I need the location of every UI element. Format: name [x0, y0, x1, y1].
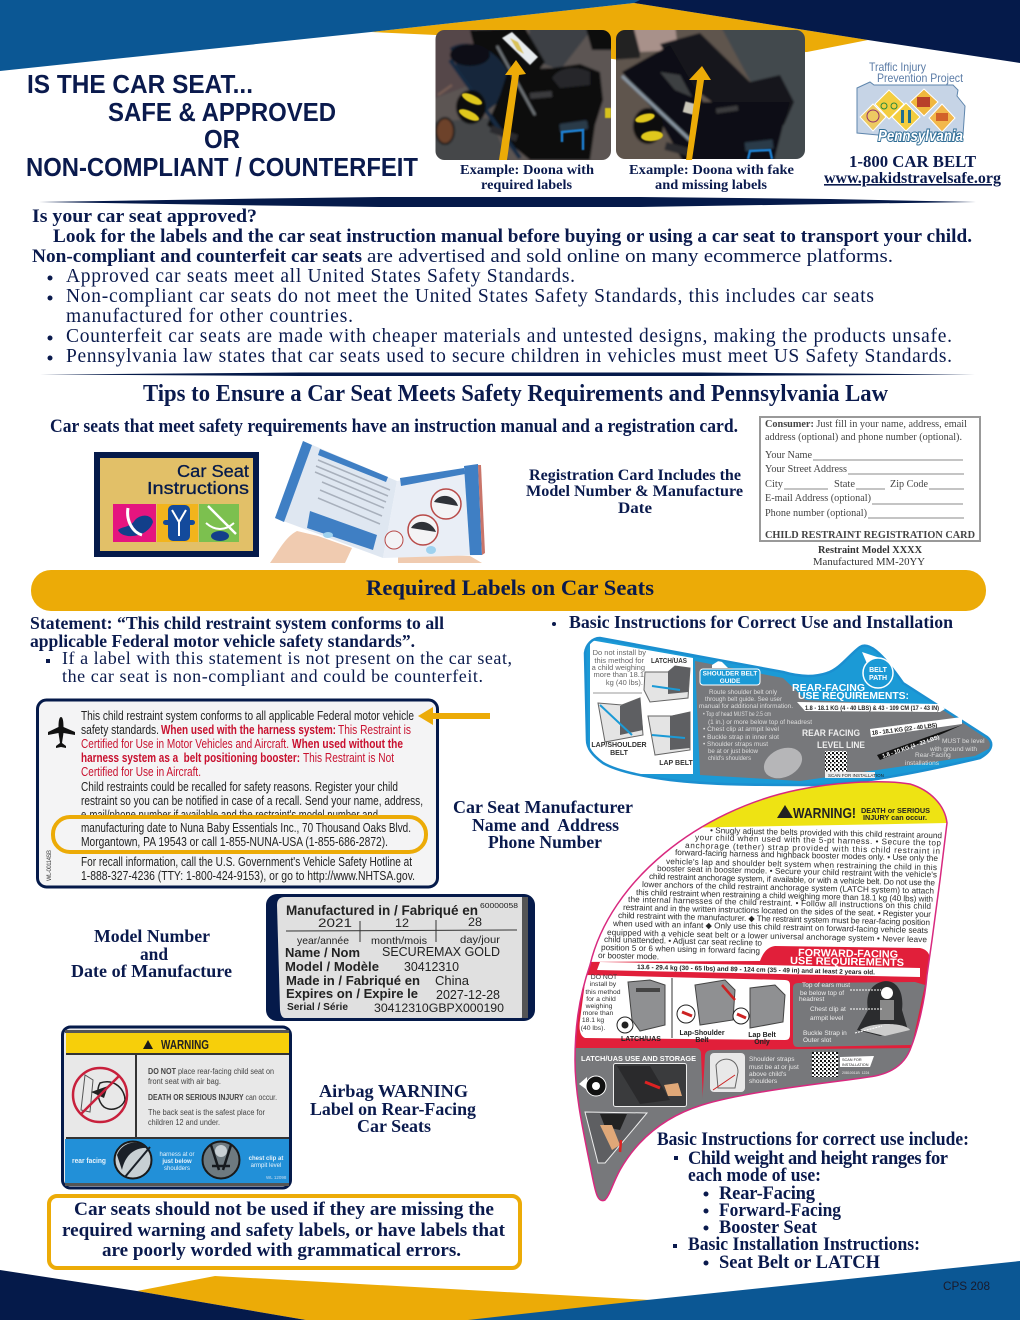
label: airbag warning: The back seat is the safest place for	[148, 1108, 265, 1117]
footer background: navy, gold and blue wedges	[0, 1261, 1020, 1320]
forward-facing install methods: Belt	[695, 1037, 709, 1044]
header background: blue, gold and navy wedges	[0, 0, 1020, 71]
icon: chest clip	[202, 1142, 240, 1178]
warning body text: when used with an infant ◆ Only use this child restraint on forward-facing vehicle seats	[612, 919, 928, 935]
image: instruction manual held open	[270, 441, 485, 563]
statement text: If a label with this statement is not present on the car seat,	[62, 648, 512, 668]
label: rear-facing use requirements: (1 in.) or more below top of headrest	[708, 719, 812, 726]
QR code	[825, 751, 884, 778]
statement text: applicable Federal motor vehicle safety standards”.	[30, 631, 415, 651]
list: basic instructions for correct use: Booster Seat	[719, 1218, 818, 1238]
warning body text: lower anchors of the child restraint anchorage system (LATCH system) to attach	[642, 880, 935, 896]
warning body text: or booster mode.	[598, 951, 659, 961]
label: federal standards statement	[38, 700, 438, 887]
label: federal standards statement: 1-888-327-4236 (TTY: 1-800-424-9153), or go to http://www.NHTSA.gov.	[81, 869, 415, 883]
label: rear-facing use requirements: Do not install by	[593, 648, 646, 657]
warning heading	[777, 805, 930, 822]
title	[26, 71, 418, 182]
document code: CPS 208	[943, 1279, 990, 1293]
label: federal standards statement: restraint so you can be notified in case of a recall. Send your name, address,	[81, 794, 423, 808]
shoulder strap panel: SCAN FOR	[842, 1058, 862, 1062]
text: manufacturer name and address: Car Seat Manufacturer	[453, 797, 633, 817]
belt path badge	[862, 652, 893, 688]
label: federal standards statement: Certified for Use in Motor Vehicles and Aircraft.	[81, 737, 289, 751]
label: airbag warning	[62, 1027, 290, 1188]
label: rear-facing use requirements: REAR FACING	[802, 728, 860, 739]
registration card: address (optional) and phone number (optional).	[765, 432, 962, 443]
forward-facing check panel: armpit level	[810, 1015, 844, 1022]
text: registration card description: Model Number & Manufacture	[526, 483, 743, 500]
shoulder belt guide tag	[700, 669, 760, 685]
label: forward-facing warning	[570, 770, 955, 1215]
label: airbag warning: harness at or	[159, 1152, 195, 1158]
photo captions: Example: Doona with fake	[629, 163, 794, 178]
forward-facing check panel: Top of ears must	[802, 982, 850, 989]
callout: missing labels warning	[49, 1196, 520, 1268]
text: airbag warning	[310, 1081, 476, 1136]
title: SAFE & APPROVED	[108, 99, 336, 127]
icon: booster seat	[199, 504, 239, 542]
arrow: points to statement	[418, 707, 490, 725]
label: federal standards statement: For recall information, call the U.S. Government's Vehicle Safety Hotline at	[81, 855, 412, 869]
shoulder strap panel	[710, 1052, 874, 1092]
label: federal standards statement: This Restraint is Not	[303, 751, 394, 765]
label: manufacture date and model: 30412310	[404, 960, 459, 974]
intro text block: are advertised and sold online on many ecommerce platforms.	[367, 246, 893, 267]
warning heading: WARNING!	[793, 806, 856, 822]
forward-facing check panel	[799, 981, 910, 1044]
registration card: State	[834, 479, 855, 490]
panel: car seat instructions	[94, 452, 259, 557]
label: manufacture date and model: Model / Modèle	[285, 960, 379, 974]
bullet: basic instructions heading: Basic Instructions for Correct Use and Installation	[569, 612, 953, 632]
forward-facing install methods: more than	[583, 1010, 614, 1017]
warning body text: child restraint with the manufacturer. ◆ The restraint system must be rear-facing position	[618, 911, 931, 927]
text: airbag warning: Car Seats	[357, 1116, 431, 1136]
level line bands: 1.8 - 10 KG (4 - 22 LBS)	[882, 735, 941, 760]
forward-facing install methods: for a child	[586, 996, 616, 1003]
label: manufacture date and model: 2027-12-28	[436, 988, 500, 1002]
label: airbag warning: front seat with air bag.	[148, 1077, 221, 1086]
shoulder strap panel: 20810011B 1224	[842, 1071, 869, 1075]
forward-facing install methods: weighing	[585, 1003, 613, 1010]
warning body text: your child when used with the 5-pt harness. • Secure the top	[695, 833, 942, 848]
label: federal standards statement: safety standards.	[81, 723, 159, 737]
forward-facing requirements heading	[790, 947, 904, 969]
registration card model caption: Restraint Model XXXX	[818, 545, 922, 556]
label: airbag warning: WARNING	[161, 1037, 209, 1052]
registration card model caption	[813, 545, 925, 568]
label: manufacture date and model: Expires on / Expire le	[286, 987, 418, 1001]
text: registration card description	[526, 467, 743, 517]
label: rear-facing use requirements: kg (40 lbs).	[606, 678, 643, 687]
warning body text: child unattended. • Adjust car seat recline to	[604, 935, 763, 948]
label: airbag warning: rear facing	[72, 1158, 106, 1165]
icon: harness seat	[157, 504, 198, 542]
list: basic instructions for correct use: Child weight and height ranges for	[688, 1149, 948, 1169]
label: airbag warning: WL 12098	[266, 1175, 287, 1180]
text: manufacturer name and address	[453, 797, 633, 852]
label: rear-facing use requirements: be at or just below	[708, 748, 758, 755]
intro text block: Look for the labels and the car seat instruction manual before buying or using a car seat to transport your child.	[53, 226, 972, 247]
label: federal standards statement: This child restraint system conforms to all applicable Federal motor vehicle	[81, 709, 414, 723]
forward-facing install methods: (40 lbs).	[581, 1025, 605, 1032]
callout: missing labels warning: required warning and safety labels, or have labels that	[62, 1220, 506, 1241]
level line bands: 18 - 18.1 KG (22 - 40 LBS)	[872, 723, 938, 737]
warning heading: DEATH or SERIOUS	[861, 806, 930, 815]
warning body text: anchorage (tether) strap provided with this child restraint in	[685, 841, 941, 856]
bullet list: safety standards: Non-compliant car seats do not meet the United States Safety Standards, this includes car seats	[66, 286, 874, 307]
label: rear-facing use requirements: through belt guide. See user	[705, 696, 783, 703]
bullet list: safety standards: Counterfeit car seats are made with cheaper materials and untested designs, making the products unsafe.	[66, 326, 952, 347]
label: rear-facing use requirements: • Buckle strap in inner slot	[703, 734, 779, 741]
forward-facing check panel: Outer slot	[803, 1037, 831, 1044]
list: basic instructions for correct use: Rear-Facing	[719, 1184, 816, 1204]
registration card: Zip Code	[890, 479, 928, 490]
title: IS THE CAR SEAT...	[27, 71, 253, 99]
label: federal standards statement: Child restraints could be recalled for safety reasons. Register your child	[81, 780, 398, 794]
forward-facing install methods: Only	[754, 1039, 770, 1046]
panel: car seat instructions: Car Seat	[177, 461, 249, 481]
label: manufacture date and model: Manufactured in / Fabriqué en	[286, 902, 478, 918]
shoulder belt guide tag: GUIDE	[720, 678, 741, 685]
registration card model caption: Manufactured MM-20YY	[813, 557, 925, 568]
warning body text: booster seat in booster mode. • Secure your child restraint with the vehicle's	[657, 864, 937, 879]
shoulder strap panel: above child's	[749, 1071, 787, 1078]
label: airbag warning: chest clip at	[249, 1156, 283, 1162]
list: basic instructions for correct use: Basic Installation Instructions:	[688, 1235, 920, 1255]
label: rear-facing use requirements: installations	[905, 760, 940, 767]
intro text block: Is your car seat approved?	[32, 206, 257, 227]
label: forward-facing warning: 13.6 - 29.4 kg (30 - 65 lbs) and 89 - 124 cm (35 - 49 in) and at least 2 years old.	[637, 964, 875, 976]
warning body text: vehicle's lap and shoulder belt system when restraining the child in this	[666, 857, 937, 872]
label: rear-facing use requirements: more than 18.1	[594, 670, 644, 679]
warning body text: • Snugly adjust the belts provided with this child restraint around	[710, 826, 943, 840]
forward-facing check panel: Buckle Strap in	[803, 1030, 847, 1037]
bullet list: safety standards: Approved car seats meet all United States Safety Standards.	[66, 266, 575, 287]
bullet list: safety standards: manufactured for other countries.	[66, 306, 353, 327]
label: rear-facing use requirements: LAP/SHOULDER	[591, 742, 647, 749]
label: federal standards statement: manufacturing date to Nuna Baby Essentials Inc., 70 Thousand Oaks Blvd.	[81, 821, 411, 835]
text: airbag warning: Airbag WARNING	[319, 1081, 468, 1101]
photo: Doona with required labels	[436, 30, 611, 160]
forward-facing requirements heading: FORWARD-FACING	[798, 947, 898, 961]
label: airbag warning: just below	[161, 1159, 192, 1165]
registration card: CHILD RESTRAINT REGISTRATION CARD	[765, 529, 975, 541]
latch use and storage panel	[579, 1056, 696, 1163]
list: basic instructions for correct use: Forward-Facing	[719, 1201, 842, 1221]
intro text block	[32, 206, 972, 267]
level line bands	[870, 717, 962, 760]
text: model number and date: and	[140, 944, 168, 964]
forward-facing install methods	[581, 974, 785, 1046]
icon: airplane	[48, 717, 75, 748]
callout: missing labels warning: Car seats should not be used if they are missing the	[74, 1199, 494, 1220]
forward-facing check panel: be below top of	[800, 990, 844, 997]
warning body text: the internal harnesses of the child restraint. • Follow all instructions on this child	[628, 895, 932, 911]
label: rear-facing use requirements: manual for additional information.	[699, 703, 793, 710]
text: registration card description: Date	[618, 500, 652, 517]
forward-facing check panel: headrest	[799, 996, 824, 1003]
shoulder strap panel: INSTALLATION	[842, 1063, 869, 1067]
forward-facing install methods: this method	[585, 989, 621, 996]
shoulder belt guide tag: SHOULDER BELT	[703, 670, 757, 678]
label: federal standards statement: Certified for Use in Aircraft.	[81, 765, 201, 779]
list: basic instructions for correct use: Basic Instructions for correct use include:	[657, 1130, 969, 1150]
banner: required labels	[31, 570, 986, 611]
label: airbag warning: children 12 and under.	[148, 1118, 220, 1127]
text: manufacturer name and address: Phone Number	[488, 832, 602, 852]
photo captions: Example: Doona with	[460, 163, 594, 178]
label: manufacture date and model: year/année	[297, 935, 349, 947]
list: basic instructions for correct use: Seat Belt or LATCH	[719, 1253, 881, 1273]
callout: missing labels warning: are poorly worded with grammatical errors.	[102, 1240, 461, 1261]
photo captions: and missing labels	[655, 178, 768, 193]
panel: car seat instructions: Instructions	[147, 478, 249, 498]
list: basic instructions for correct use	[657, 1130, 969, 1273]
icon: rear-facing seat	[113, 504, 156, 542]
warning heading: INJURY can occur.	[863, 813, 927, 822]
heading: tips: Tips to Ensure a Car Seat Meets Safety Requirements and Pennsylvania Law	[143, 381, 889, 407]
belt path badge: PATH	[869, 675, 887, 682]
registration card: Your Name	[765, 450, 812, 461]
label: federal standards statement: When used without the	[292, 737, 403, 751]
forward-facing install methods: Lap Belt	[748, 1032, 776, 1039]
label: manufacture date and model: 60000058	[480, 901, 518, 910]
icon: harness at shoulders	[114, 1142, 152, 1178]
weight strip: 1.8 - 18.1 KG (4 - 40 LBS) & 43 - 109 CM (17 - 43 IN)	[805, 705, 939, 712]
label: rear-facing use requirements: a child weighing	[592, 663, 645, 672]
registration card: Consumer: Just fill in your name, address, email	[765, 419, 967, 430]
label: rear-facing use requirements: Rear-Facing	[915, 752, 951, 759]
label: rear-facing use requirements: LEVEL LINE	[817, 740, 865, 751]
icon: seat latch	[644, 666, 690, 702]
shoulder strap panel: Shoulder straps	[749, 1056, 795, 1063]
registration card	[760, 417, 980, 541]
label: airbag warning: armpit level	[251, 1163, 281, 1169]
registration card: E-mail Address (optional)	[765, 493, 871, 504]
icon: seat lap belt	[648, 712, 690, 755]
forward-facing requirements heading: USE REQUIREMENTS	[790, 955, 904, 969]
intro text block: Non-compliant and counterfeit car seats	[32, 246, 362, 267]
label: airbag warning: DEATH OR SERIOUS INJURY can occur.	[148, 1093, 277, 1102]
label: rear-facing use requirements: • Top of head MUST be 2.5 cm	[703, 711, 771, 718]
label: rear-facing use requirements: • Shoulder straps must	[703, 741, 768, 748]
statement text: the car seat is non-compliant and could be counterfeit.	[62, 666, 483, 686]
label: rear-facing use requirements: • Chest clip at armpit level	[703, 726, 780, 733]
contact: phone and website: www.pakidstravelsafe.org	[824, 170, 1001, 187]
warning body text: this child restraint when restraining a child weighing more than 18.1 kg (40 lbs) with	[636, 888, 934, 904]
contact: phone and website	[824, 152, 1001, 187]
label: rear-facing use requirements: MUST be level	[942, 738, 985, 745]
label: federal standards statement: WL-00114SB	[47, 850, 53, 881]
photo: Doona with fake labels	[616, 30, 805, 159]
text: registration card description: Registration Card Includes the	[529, 467, 741, 484]
warning body text	[598, 826, 943, 961]
contact: phone and website: 1-800 CAR BELT	[849, 152, 976, 171]
belt path badge: BELT	[869, 667, 888, 674]
label: federal standards statement: When used with the harness system:	[161, 723, 336, 737]
logo: Traffic Injury Prevention Project Pennsylvania	[857, 60, 965, 145]
label: manufacture date and model: 28	[468, 915, 482, 929]
label: manufacture date and model: Made in / Fabriqué en	[286, 974, 420, 988]
registration card: Your Street Address	[765, 464, 847, 475]
label: manufacture date and model: Serial / Série	[287, 1001, 348, 1013]
photo captions	[460, 163, 794, 193]
label: rear-facing use requirements: this method for	[594, 656, 644, 665]
label: rear-facing use requirements: REAR-FACING	[792, 683, 865, 694]
QR code: SCAN FOR INSTALLATION	[828, 773, 884, 778]
label: rear-facing use requirements: LATCH/UAS	[651, 658, 687, 665]
registration card: Phone number (optional)	[765, 508, 867, 519]
text: model number and date: Model Number	[94, 926, 210, 946]
label: manufacture date and model	[266, 894, 535, 1021]
label: rear-facing use requirements: with ground with	[929, 746, 977, 753]
label: manufacture date and model: day/jour	[460, 934, 501, 946]
label: manufacture date and model: China	[435, 974, 469, 988]
bullet list: safety standards	[48, 266, 952, 367]
text: manufacturer name and address: Name and Address	[472, 815, 619, 835]
logo: Traffic Injury Prevention Project Pennsylvania: Traffic Injury	[869, 60, 926, 74]
shoulder strap panel: shoulders	[749, 1078, 778, 1085]
label: manufacture date and model: 30412310GBPX000190	[374, 1001, 504, 1015]
warning body text: child restraint anchorage system, if available, or with a vehicle belt. Do not use the	[649, 872, 936, 887]
warning body text: equipped with a vehicle seat belt or a lower universal anchorage system • Never leave	[607, 928, 928, 944]
label: federal standards statement: This Restraint is	[338, 723, 411, 737]
warning body text: position 5 or 6 when using in forward facing	[601, 943, 761, 956]
statement text	[30, 613, 512, 686]
label: airbag warning: DO NOT place rear-facing child seat on	[148, 1067, 274, 1076]
label: airbag warning: shoulders	[164, 1166, 190, 1172]
text: model number and date: Date of Manufacture	[71, 961, 232, 981]
forward-facing check panel: Chest clip at	[810, 1006, 846, 1013]
label: rear-facing use requirements: LAP BELT	[659, 760, 694, 767]
label: rear-facing use requirements	[580, 630, 1000, 790]
text: model number and date	[71, 926, 232, 981]
logo: Traffic Injury Prevention Project Pennsylvania: Pennsylvania	[878, 128, 963, 145]
warning body text: restraint and in the written instructions located on the sides of the seat. • Register your	[623, 903, 931, 919]
shoulder strap panel: must be at or just	[749, 1064, 799, 1071]
forward-facing install methods: DO NOT	[591, 974, 617, 981]
title: OR	[204, 126, 240, 154]
logo: Traffic Injury Prevention Project Pennsylvania: Prevention Project	[877, 71, 964, 85]
weight strip	[797, 702, 945, 712]
label: manufacture date and model: SECUREMAX GOLD	[382, 945, 500, 959]
icon: no rear-facing seat in front of airbag	[73, 1068, 127, 1122]
label: manufacture date and model: month/mois	[371, 935, 427, 947]
banner: required labels: Required Labels on Car Seats	[366, 575, 654, 600]
statement text: Statement: “This child restraint system conforms to all	[30, 613, 444, 633]
registration card: City	[765, 479, 784, 490]
label: rear-facing use requirements: Route shoulder belt only	[709, 689, 778, 696]
arrow: missing labels	[686, 66, 711, 160]
label: federal standards statement: Morgantown, PA 19543 or call 1-855-NUNA-USA (1-855-686-2872).	[81, 835, 388, 849]
icon: seat lap-shoulder belt	[598, 698, 643, 742]
title: NON-COMPLIANT / COUNTERFEIT	[26, 154, 418, 182]
label: federal standards statement: harness system as a belt positioning booster:	[81, 751, 300, 765]
latch use and storage panel: LATCH/UAS USE AND STORAGE	[581, 1056, 696, 1063]
label: manufacture date and model: Name / Nom	[285, 946, 360, 960]
label: manufacture date and model: 2021	[318, 916, 352, 930]
label: rear-facing use requirements: USE REQUIREMENTS:	[798, 691, 909, 702]
label: federal standards statement: e-mail/phone number if available and the restraint's model number and	[81, 808, 378, 822]
warning body text: forward-facing harness and highback booster modes only. • Use only the	[675, 848, 939, 863]
forward-facing install methods: install by	[590, 981, 617, 988]
bullet list: safety standards: Pennsylvania law states that car seats used to secure children in vehicles must meet US Safety Standards.	[66, 346, 952, 367]
label: manufacture date and model: 12	[395, 916, 409, 930]
subheading: manual and card: Car seats that meet safety requirements have an instruction manual and a registration card.	[50, 417, 738, 437]
text: airbag warning: Label on Rear-Facing	[310, 1099, 476, 1119]
forward-facing install methods: Lap-Shoulder	[679, 1030, 725, 1037]
forward-facing install methods: 18.1 kg	[582, 1017, 604, 1024]
forward-facing install methods: LATCH/UAS	[621, 1036, 661, 1043]
label: rear-facing use requirements: BELT	[610, 750, 629, 757]
label: rear-facing use requirements: child's shoulders	[708, 755, 752, 762]
arrow: required labels	[499, 60, 526, 160]
photo captions: required labels	[481, 178, 573, 193]
list: basic instructions for correct use: each mode of use:	[688, 1166, 821, 1186]
